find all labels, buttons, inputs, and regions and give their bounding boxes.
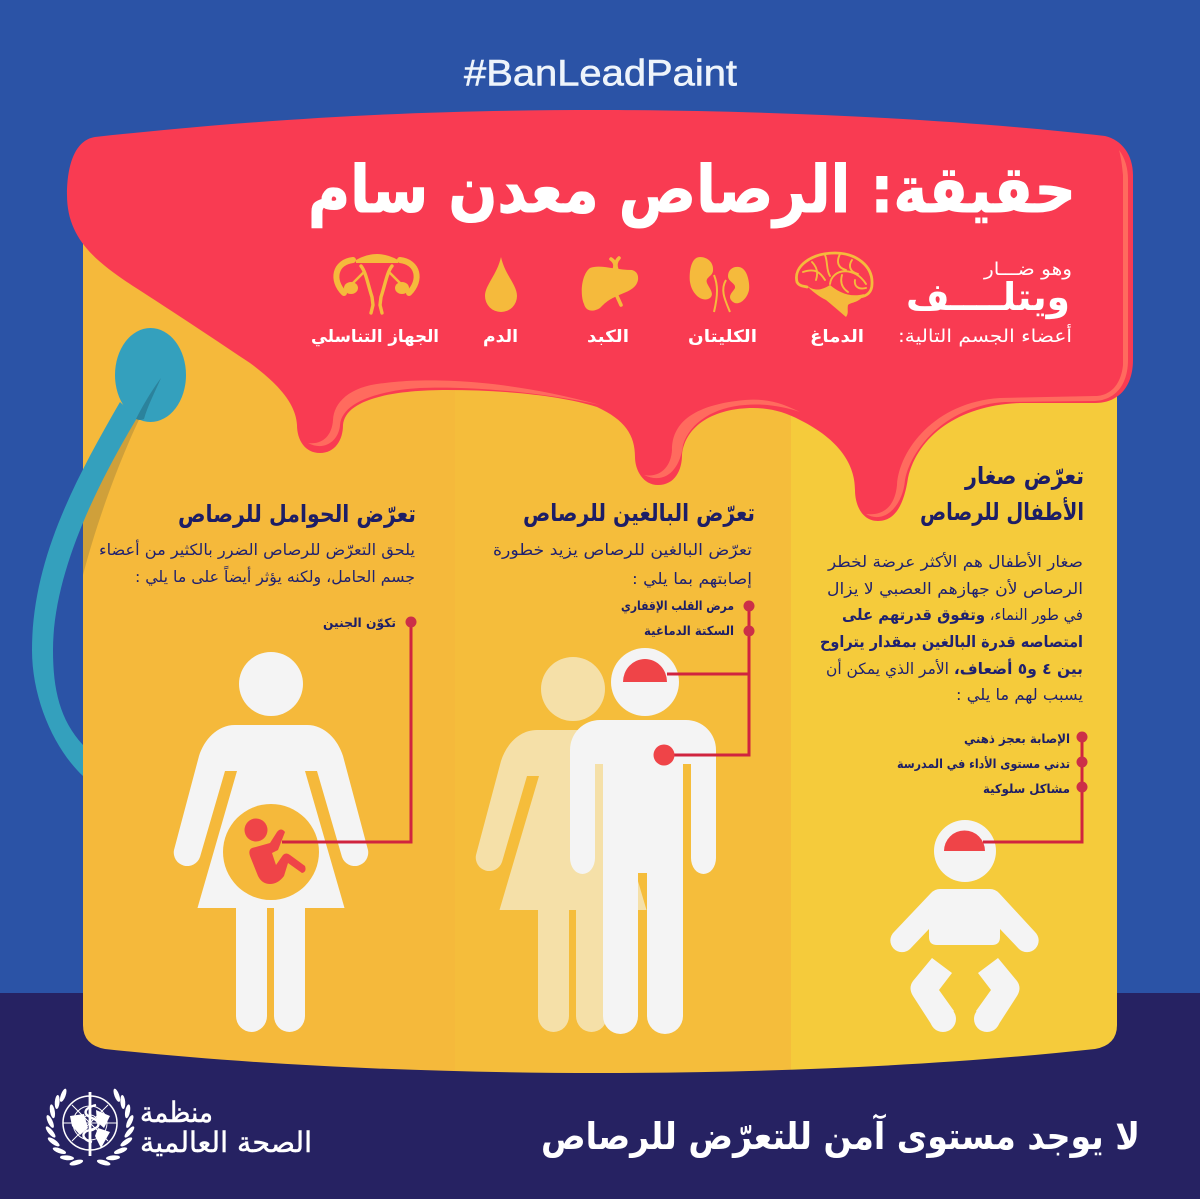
icon: liver (582, 258, 638, 311)
text block: children: يسبب لهم ما يلي : (956, 686, 1083, 705)
title: حقيقة: الرصاص معدن سام (308, 153, 1076, 228)
text block: children (820, 552, 1083, 705)
hashtag: #BanLeadPaint (464, 52, 738, 94)
icon: baby (890, 820, 1039, 1032)
bucket handle (32, 328, 186, 776)
text block: adults: إصابتهم بما يلي : (632, 570, 752, 589)
text block: children: الرصاص لأن جهازهم العصبي لا يزال (827, 579, 1083, 599)
list: child effects: الإصابة بعجز ذهني (964, 731, 1070, 746)
callout line: adult (623, 600, 754, 766)
icon: brain (796, 253, 872, 317)
intro text block: وهو ضـــار (983, 259, 1072, 280)
icon: blood drop (485, 257, 517, 312)
panel: adults (476, 499, 755, 1034)
panel: young children (820, 462, 1088, 1032)
red paint spill (67, 110, 1133, 521)
list: child effects: مشاكل سلوكية (983, 781, 1070, 796)
organ labels: الدم (483, 327, 518, 347)
text block: adults (493, 541, 752, 589)
text block: pregnant women (99, 539, 415, 587)
callout line: fetus (282, 616, 416, 842)
list: adult effects: السكتة الدماغية (644, 623, 734, 638)
paint bucket body (83, 200, 1117, 1100)
organ labels: الكبد (587, 327, 629, 347)
heading: children: الأطفال للرصاص (920, 497, 1084, 526)
WHO emblem (44, 1088, 136, 1167)
heading: children (920, 462, 1084, 526)
heading: adults: تعرّض البالغين للرصاص (523, 499, 755, 527)
icon: fetus (244, 818, 306, 884)
heading: children: تعرّض صغار (964, 462, 1084, 490)
list: fetal effect: تكوّن الجنين (323, 615, 396, 630)
text block: children: صغار الأطفال هم الأكثر عرضة لخطر (827, 552, 1083, 571)
background: navy floor (0, 993, 1200, 1199)
icon: kidneys (690, 257, 749, 312)
icon: reproductive system (336, 254, 417, 313)
text block: adults: تعرّض البالغين للرصاص يزيد خطورة (493, 541, 752, 559)
heading: pregnant women: تعرّض الحوامل للرصاص (178, 500, 416, 528)
organ labels: الكليتان (688, 327, 757, 347)
icon: pregnant woman (174, 652, 368, 1032)
text block: children: بين ٤ و٥ أضعاف، الأمر الذي يمكن أن (826, 658, 1083, 679)
intro text block: أعضاء الجسم التالية: (898, 324, 1072, 347)
callout line: child (944, 732, 1088, 851)
WHO name: الصحة العالمية (140, 1126, 312, 1159)
icon: man (570, 648, 716, 1034)
list: adult effects: مرض القلب الإقفاري (621, 598, 734, 613)
icon: faded woman (476, 657, 670, 1032)
intro text block (898, 259, 1072, 347)
list: adult effects (621, 598, 734, 638)
WHO name: منظمة (140, 1096, 213, 1129)
list: child effects (897, 731, 1070, 796)
organ labels: الجهاز التناسلي (311, 327, 439, 347)
intro text block: ويتلــــف (906, 275, 1070, 320)
text block: children: امتصاصه قدرة البالغين بمقدار يتراوح (820, 633, 1083, 651)
list: child effects: تدني مستوى الأداء في المدرسة (897, 756, 1070, 771)
bottom message: لا يوجد مستوى آمن للتعرّض للرصاص (541, 1113, 1140, 1158)
panel: pregnant women (99, 500, 416, 1032)
text block: pregnant women: يلحق التعرّض للرصاص الضرر بالكثير من أعضاء (99, 539, 415, 559)
organ labels: الدماغ (810, 327, 864, 347)
organ labels (311, 327, 864, 347)
text block: pregnant women: جسم الحامل، ولكنه يؤثر أيضاً على ما يلي : (135, 566, 415, 587)
WHO name (140, 1096, 312, 1159)
text block: children: في طور النماء، وتفوق قدرتهم على (842, 606, 1083, 625)
